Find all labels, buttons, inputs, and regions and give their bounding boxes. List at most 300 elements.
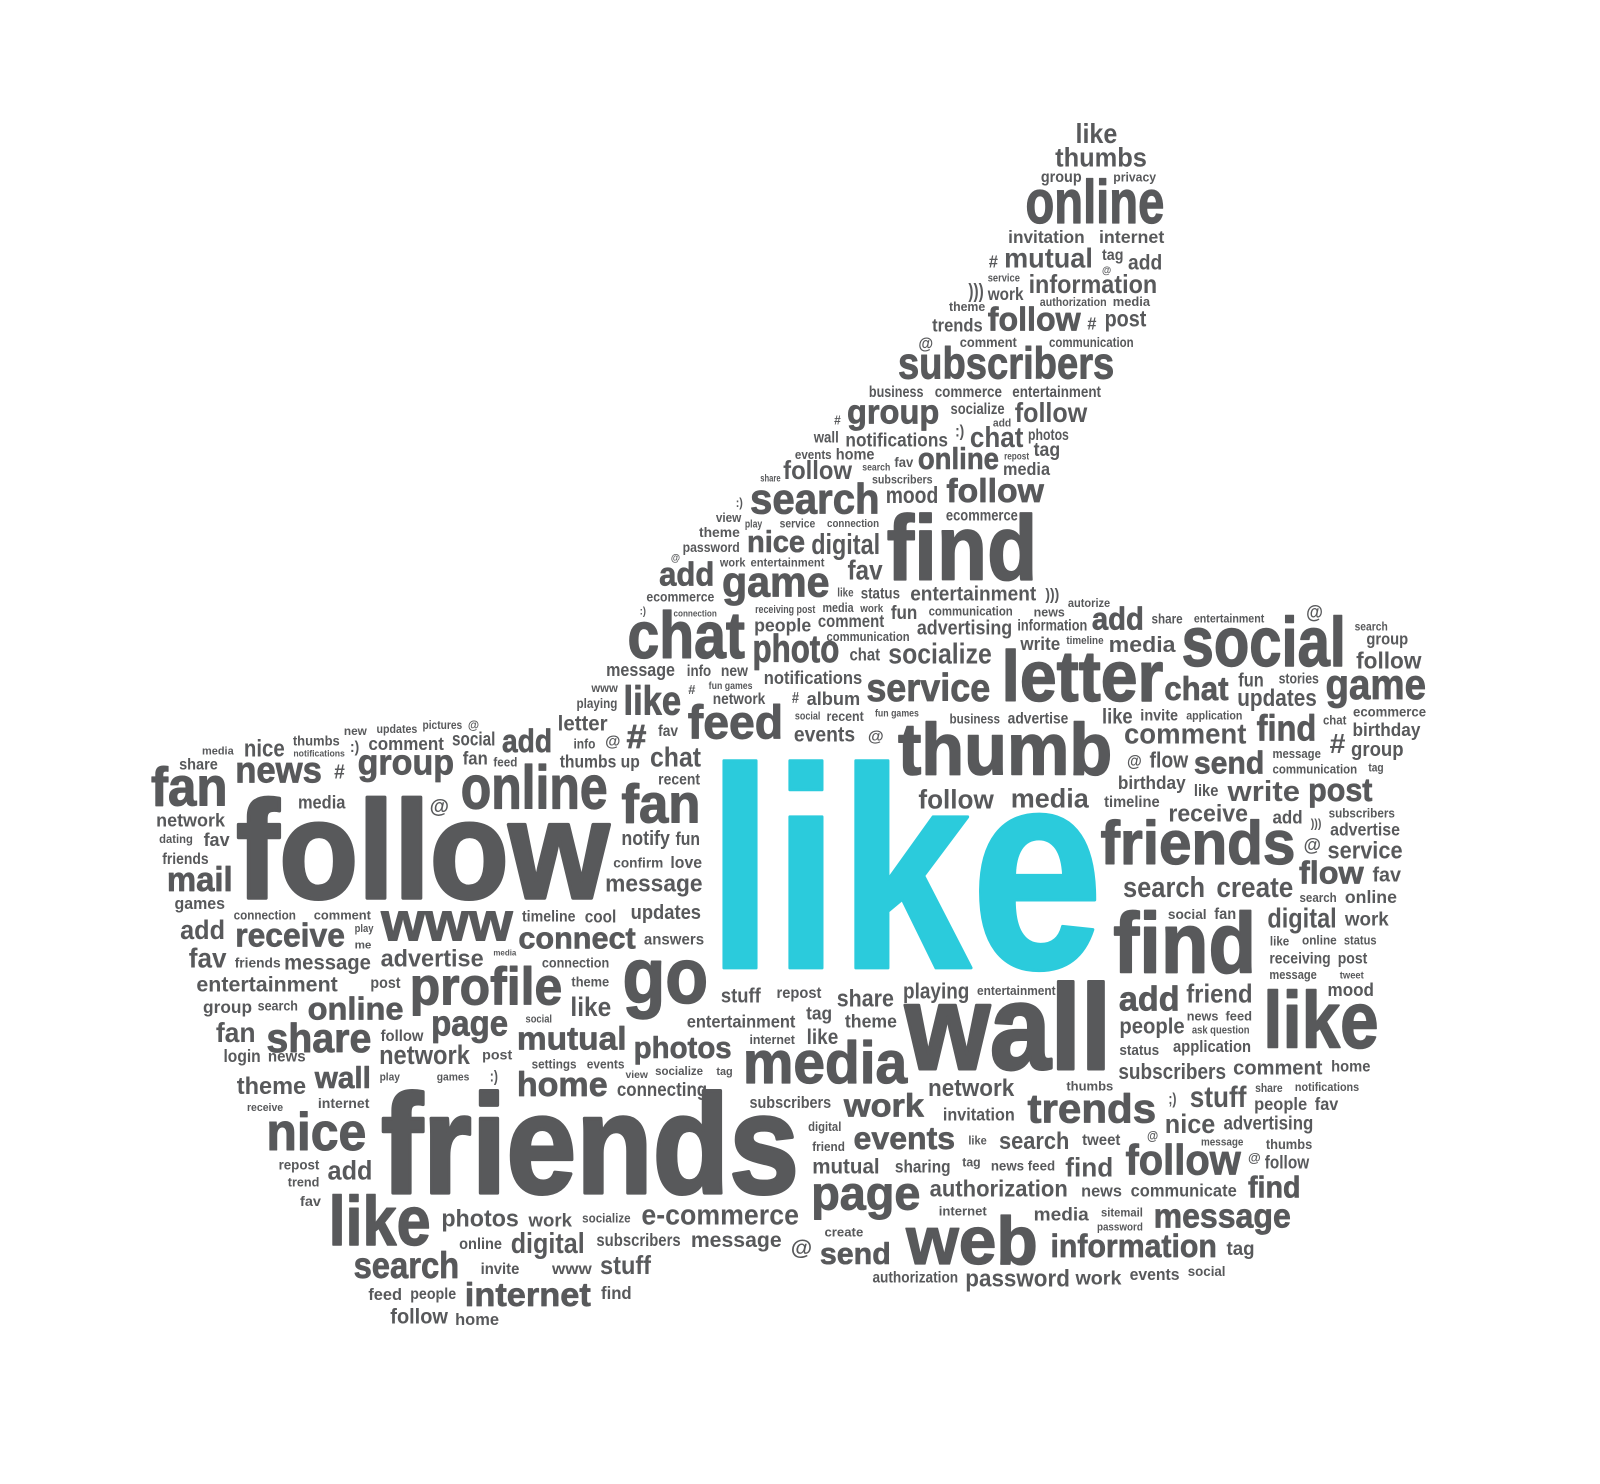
- words in the lower left of the hand: page: [431, 1004, 508, 1044]
- words on the right of the hand: birthday: [1118, 772, 1186, 793]
- words in the upper left of the hand: message: [605, 870, 703, 897]
- words at the bottom right of the hand: password: [1097, 1222, 1143, 1234]
- words in the thumb: home: [836, 447, 874, 464]
- words in the upper left of the hand: fan: [621, 772, 701, 834]
- large word: chat: chat: [628, 599, 745, 673]
- words in the upper left of the hand: fav: [189, 942, 227, 973]
- words in the knuckles row: advertising: [917, 618, 1012, 640]
- words in the lower left of the hand: events: [587, 1056, 624, 1071]
- words in the lower left of the hand: share: [266, 1015, 371, 1061]
- words in the upper left of the hand: comment: [314, 907, 371, 922]
- words at the bottom right of the hand: communicate: [1131, 1180, 1237, 1200]
- words in the upper left of the hand: info: [573, 736, 596, 752]
- words in the upper left of the hand: media: [493, 949, 517, 958]
- words in the upper left of the hand: pictures: [422, 718, 462, 732]
- words at the bottom right of the hand: tweet: [1082, 1132, 1120, 1149]
- words at the bottom right of the hand: share: [837, 986, 894, 1013]
- words in the upper left of the hand: fun: [676, 828, 700, 849]
- words at the bottom right of the hand: tag: [806, 1002, 832, 1023]
- large word: online: online: [1026, 168, 1164, 236]
- words in the upper left of the hand: www: [380, 890, 513, 952]
- words at the bottom right of the hand: theme: [845, 1011, 897, 1032]
- large word: follow: follow: [236, 773, 610, 928]
- words on the right of the hand: fav: [1315, 1094, 1339, 1114]
- words at the bottom right of the hand: web: [905, 1204, 1038, 1279]
- words on the right of the hand: receive: [1168, 800, 1248, 827]
- words on the right of the hand: media: [1011, 784, 1089, 814]
- words in the upper left of the hand: :): [350, 739, 359, 756]
- words at the bottom right of the hand: subscribers: [749, 1094, 831, 1112]
- large word: wall: wall: [904, 960, 1111, 1095]
- words in the thumb: privacy: [1113, 170, 1157, 185]
- words in the thumb: view: [716, 510, 742, 525]
- words in the knuckles row: add: [1092, 601, 1144, 637]
- words in the knuckles row: timeline: [1066, 635, 1104, 647]
- words in the upper left of the hand: group: [358, 742, 454, 782]
- words in the lower left of the hand: play: [380, 1072, 401, 1084]
- words on the right of the hand: find: [1113, 895, 1256, 991]
- words in the thumb: follow: [1015, 397, 1088, 428]
- words on the right of the hand: social: [1168, 907, 1207, 923]
- words on the right of the hand: online: [1345, 887, 1397, 907]
- words in the upper left of the hand: receive: [235, 917, 345, 954]
- words at the bottom right of the hand: digital: [808, 1119, 841, 1134]
- words in the knuckles row: find: [1257, 708, 1316, 748]
- words in the upper left of the hand: @: [430, 796, 449, 818]
- words in the knuckles row: new: [721, 663, 748, 680]
- words on the right of the hand: post: [1338, 950, 1367, 967]
- words in the upper left of the hand: @: [468, 718, 479, 732]
- words in the thumb: digital: [811, 529, 880, 561]
- words in the lower left of the hand: work: [528, 1210, 573, 1231]
- words in the knuckles row: like: [623, 677, 681, 723]
- words in the thumb: status: [861, 585, 900, 602]
- words in the knuckles row: autorize: [1068, 596, 1110, 610]
- words at the bottom right of the hand: search: [999, 1128, 1069, 1155]
- words in the knuckles row: business: [949, 711, 1000, 727]
- words at the bottom right of the hand: sitemail: [1101, 1205, 1143, 1219]
- words in the upper left of the hand: timeline: [522, 908, 576, 925]
- words in the thumb: connection: [827, 518, 879, 530]
- words on the right of the hand: advertising: [1223, 1113, 1313, 1135]
- words in the upper left of the hand: dating: [159, 832, 193, 846]
- words in the lower left of the hand: settings: [532, 1056, 577, 1071]
- words in the upper left of the hand: recent: [658, 772, 700, 789]
- words on the right of the hand: add: [1272, 806, 1303, 827]
- words at the bottom right of the hand: message: [1201, 1136, 1243, 1148]
- words in the knuckles row: media: [1109, 632, 1176, 657]
- words in the thumb: @: [918, 335, 933, 353]
- words on the right of the hand: send: [1194, 744, 1264, 780]
- words at the bottom right of the hand: @: [1248, 1150, 1261, 1165]
- words in the lower left of the hand: login: [223, 1046, 261, 1066]
- words in the upper left of the hand: online: [461, 754, 608, 822]
- words in the knuckles row: ecommerce: [1353, 704, 1426, 720]
- words at the bottom right of the hand: like: [807, 1025, 838, 1049]
- words on the right of the hand: advertise: [1330, 820, 1400, 840]
- words on the right of the hand: network: [928, 1075, 1015, 1102]
- words in the thumb: follow: [783, 457, 852, 485]
- words in the knuckles row: receiving post: [755, 604, 816, 616]
- words in the knuckles row: news: [1034, 604, 1065, 619]
- words in the thumb: connection: [673, 608, 717, 618]
- words in the knuckles row: fun: [891, 602, 917, 624]
- words on the right of the hand: events: [794, 722, 855, 746]
- words at the bottom right of the hand: message: [1154, 1198, 1291, 1236]
- words on the right of the hand: communication: [1272, 761, 1357, 776]
- words in the lower left of the hand: subscribers: [596, 1230, 681, 1250]
- words in the thumb: :): [736, 495, 743, 510]
- words at the bottom right of the hand: events: [1130, 1266, 1180, 1284]
- words in the thumb: entertainment: [910, 584, 1036, 606]
- words in the upper left of the hand: share: [179, 756, 218, 773]
- words in the lower left of the hand: online: [459, 1236, 502, 1253]
- words on the right of the hand: post: [1308, 771, 1373, 808]
- words in the upper left of the hand: cool: [585, 906, 616, 926]
- words on the right of the hand: status: [1119, 1043, 1159, 1059]
- words in the thumb: service: [988, 273, 1020, 285]
- words in the thumb: events: [795, 447, 832, 462]
- words at the bottom right of the hand: find: [1065, 1153, 1113, 1183]
- words at the bottom right of the hand: password: [965, 1266, 1070, 1293]
- words on the right of the hand: invitation: [943, 1104, 1015, 1124]
- words in the thumb: thumbs: [1055, 142, 1147, 172]
- words in the lower left of the hand: stuff: [600, 1252, 651, 1280]
- words on the right of the hand: flow: [1149, 747, 1189, 772]
- words in the upper left of the hand: love: [670, 854, 702, 872]
- words in the thumb: password: [683, 540, 740, 556]
- words in the lower left of the hand: socialize: [582, 1210, 631, 1225]
- words in the knuckles row: chat: [1323, 713, 1347, 728]
- words in the lower left of the hand: fan: [216, 1017, 256, 1048]
- words in the lower left of the hand: search: [354, 1245, 459, 1286]
- words in the thumb: information: [1029, 271, 1157, 299]
- words at the bottom right of the hand: authorization: [930, 1175, 1068, 1201]
- words on the right of the hand: timeline: [1104, 794, 1160, 811]
- words in the lower left of the hand: [196, 934, 799, 1329]
- words in the lower left of the hand: home: [455, 1311, 499, 1329]
- words on the right of the hand: thumbs: [1066, 1078, 1113, 1093]
- words in the lower left of the hand: social: [526, 1013, 552, 1025]
- words on the right of the hand: @: [868, 728, 884, 745]
- words in the knuckles row: birthday: [1353, 719, 1421, 740]
- words in the thumb: wall: [813, 429, 839, 446]
- words in the lower left of the hand: photos: [441, 1206, 519, 1233]
- words in the knuckles row: notifications: [764, 667, 862, 688]
- words in the lower left of the hand: follow: [390, 1304, 448, 1328]
- words at the bottom right of the hand: social: [1188, 1264, 1226, 1280]
- words in the lower left of the hand: group: [203, 997, 252, 1017]
- words in the knuckles row: socialize: [888, 638, 992, 670]
- words at the bottom right of the hand: @: [791, 1236, 812, 1260]
- words in the lower left of the hand: nice: [266, 1103, 366, 1162]
- words in the knuckles row: comment: [1124, 718, 1247, 750]
- words in the upper left of the hand: updates: [631, 902, 701, 924]
- words on the right of the hand: search: [1123, 872, 1205, 904]
- words in the knuckles row: network: [713, 691, 766, 708]
- words on the right of the hand: application: [1173, 1038, 1251, 1056]
- words in the knuckles row: [558, 596, 1426, 756]
- words at the bottom right of the hand: news: [1081, 1182, 1122, 1200]
- words on the right of the hand: work: [843, 1086, 925, 1123]
- words in the upper left of the hand: nice: [244, 736, 285, 763]
- large word: letter: letter: [1002, 637, 1163, 717]
- words in the lower left of the hand: entertainment: [687, 1012, 796, 1032]
- words on the right of the hand: @: [1304, 834, 1321, 855]
- words at the bottom right of the hand: like: [968, 1133, 987, 1147]
- words in the upper left of the hand: advertise: [381, 945, 484, 972]
- words in the thumb: @: [671, 553, 680, 564]
- words on the right of the hand: feed: [1226, 1008, 1252, 1023]
- words on the right of the hand: add: [1119, 981, 1180, 1019]
- words in the knuckles row: social: [795, 710, 820, 722]
- words in the knuckles row: #: [792, 690, 799, 707]
- words in the lower left of the hand: internet: [749, 1032, 795, 1047]
- words in the lower left of the hand: go: [622, 934, 708, 1020]
- words in the thumb: comment: [960, 335, 1017, 351]
- words in the knuckles row: updates: [1237, 685, 1317, 712]
- words on the right of the hand: @: [1127, 752, 1142, 770]
- words in the upper left of the hand: friends: [235, 955, 281, 971]
- words in the thumb: subscribers: [872, 473, 933, 487]
- highlighted word: like: like: [707, 709, 1103, 1029]
- words on the right of the hand: receiving: [1269, 950, 1331, 967]
- words on the right of the hand: nice: [1165, 1109, 1215, 1139]
- words at the bottom right of the hand: information: [1051, 1227, 1217, 1264]
- words in the knuckles row: @: [1306, 601, 1323, 623]
- words in the lower left of the hand: games: [437, 1072, 469, 1084]
- words in the lower left of the hand: news: [268, 1049, 306, 1066]
- words in the upper left of the hand: me: [355, 939, 371, 951]
- words in the thumb: @: [1102, 265, 1111, 276]
- words at the bottom right of the hand: tag: [962, 1154, 981, 1169]
- words on the right of the hand: people: [1119, 1014, 1185, 1039]
- words in the upper left of the hand: updates: [377, 722, 418, 736]
- words on the right of the hand: like: [1270, 933, 1289, 948]
- words at the bottom right of the hand: mutual: [812, 1154, 880, 1178]
- words in the knuckles row: fav: [658, 723, 679, 740]
- words in the knuckles row: comment: [818, 611, 884, 631]
- words at the bottom right of the hand: authorization: [872, 1270, 958, 1287]
- words in the thumb: add: [1128, 250, 1162, 274]
- words in the upper left of the hand: confirm: [613, 855, 663, 871]
- words in the upper left of the hand: mail: [167, 861, 233, 899]
- words in the thumb: chat: [970, 422, 1024, 454]
- words in the knuckles row: follow: [1356, 647, 1422, 673]
- words in the upper left of the hand: play: [355, 923, 374, 935]
- words in the thumb: #: [989, 251, 998, 271]
- words in the knuckles row: photo: [753, 628, 839, 671]
- words in the upper left of the hand: notifications: [293, 749, 345, 759]
- words in the lower left of the hand: invite: [481, 1261, 519, 1278]
- words on the right of the hand: notifications: [1295, 1080, 1359, 1094]
- words on the right of the hand: friend: [1186, 981, 1253, 1009]
- words in the thumb: tag: [1102, 247, 1123, 264]
- words in the thumb: tag: [1034, 439, 1060, 461]
- words on the right of the hand: online: [1302, 932, 1337, 947]
- words in the thumb: [640, 118, 1165, 618]
- words in the thumb: play: [745, 519, 762, 531]
- words in the upper left of the hand: thumbs: [293, 733, 340, 749]
- words in the thumb: share: [760, 474, 781, 485]
- words in the thumb: entertainment: [1012, 384, 1101, 401]
- words at the bottom right of the hand: media: [743, 1029, 908, 1096]
- words at the bottom right of the hand: @: [1147, 1128, 1158, 1143]
- words in the lower left of the hand: stuff: [721, 986, 761, 1008]
- words in the thumb: #: [1087, 314, 1097, 334]
- large word: find: find: [887, 498, 1037, 600]
- words on the right of the hand: ;): [1168, 1091, 1177, 1108]
- words in the thumb: game: [722, 558, 830, 606]
- words in the upper left of the hand: fan: [463, 747, 488, 768]
- words in the knuckles row: communication: [929, 603, 1013, 618]
- words in the thumb: mood: [886, 482, 938, 508]
- words in the upper left of the hand: comment: [368, 733, 444, 754]
- words in the thumb: add: [659, 557, 714, 594]
- words in the thumb: trends: [932, 315, 983, 336]
- words on the right of the hand: like: [1194, 782, 1218, 800]
- words in the thumb: invitation: [1008, 227, 1085, 247]
- words in the thumb: mutual: [1004, 242, 1093, 273]
- words in the thumb: group: [847, 393, 939, 431]
- words in the knuckles row: message: [606, 659, 675, 680]
- words on the right of the hand: tag: [1368, 761, 1384, 774]
- words in the upper left of the hand: social: [452, 728, 495, 750]
- words on the right of the hand: create: [1216, 872, 1293, 904]
- words in the lower left of the hand: :): [490, 1069, 498, 1086]
- words in the lower left of the hand: tag: [716, 1066, 733, 1078]
- words on the right of the hand: follow: [918, 785, 994, 815]
- words in the upper left of the hand: add: [180, 915, 225, 945]
- words in the knuckles row: chat: [1164, 671, 1229, 708]
- words on the right of the hand: friends: [1101, 809, 1295, 877]
- words in the knuckles row: communication: [827, 629, 910, 644]
- words in the thumb: authorization: [1040, 295, 1107, 309]
- large word: friends: friends: [381, 1066, 799, 1223]
- words on the right of the hand: group: [1351, 739, 1404, 761]
- words at the bottom right of the hand: find: [1248, 1170, 1301, 1204]
- words in the thumb: ecommerce: [946, 507, 1018, 524]
- words in the lower left of the hand: view: [626, 1070, 648, 1081]
- words in the lower left of the hand: network: [379, 1040, 470, 1070]
- words in the knuckles row: work: [859, 603, 884, 615]
- words in the upper left of the hand: @: [605, 733, 620, 750]
- words in the lower left of the hand: www: [551, 1261, 592, 1278]
- words in the lower left of the hand: digital: [511, 1228, 585, 1260]
- words at the bottom right of the hand: playing: [903, 978, 969, 1003]
- words in the thumb: group: [1041, 169, 1082, 186]
- words in the knuckles row: info: [687, 663, 711, 680]
- words in the knuckles row: service: [866, 667, 990, 710]
- words in the thumb: ))): [1045, 586, 1059, 603]
- words in the lower left of the hand: wall: [314, 1061, 371, 1095]
- words in the thumb: notifications: [845, 429, 948, 451]
- words on the right of the hand: subscribers: [1329, 805, 1395, 820]
- words in the thumb: follow: [946, 473, 1045, 510]
- words in the knuckles row: share: [1152, 611, 1183, 626]
- words at the bottom right of the hand: send: [820, 1237, 891, 1271]
- words on the right of the hand: news: [1187, 1008, 1218, 1023]
- words in the thumb: media: [1113, 294, 1151, 309]
- words in the knuckles row: fun: [1238, 670, 1264, 692]
- words in the thumb: theme: [699, 525, 740, 541]
- words in the knuckles row: media: [822, 600, 854, 615]
- words on the right of the hand: stuff: [1190, 1081, 1247, 1114]
- words in the thumb: work: [719, 555, 746, 569]
- large word: thumb: thumb: [898, 708, 1112, 791]
- words in the thumb: like: [1076, 118, 1117, 149]
- words at the bottom right of the hand: internet: [939, 1203, 987, 1218]
- words on the right of the hand: [794, 722, 1404, 1139]
- words in the upper left of the hand: network: [156, 810, 226, 831]
- words in the thumb: socialize: [951, 401, 1005, 418]
- words at the bottom right of the hand: news feed: [991, 1158, 1055, 1174]
- words in the knuckles row: fun games: [709, 681, 753, 692]
- words in the thumb: online: [918, 442, 999, 476]
- words at the bottom right of the hand: repost: [777, 985, 821, 1002]
- words in the upper left of the hand: connection: [234, 907, 296, 922]
- words in the thumb: service: [780, 517, 815, 531]
- words in the thumb: add: [993, 418, 1011, 430]
- words in the knuckles row: letter: [558, 712, 608, 736]
- words in the lower left of the hand: connecting: [617, 1079, 707, 1101]
- words in the thumb: commerce: [935, 384, 1002, 401]
- words in the upper left of the hand: #: [334, 762, 346, 784]
- words on the right of the hand: flow: [1299, 855, 1364, 891]
- words in the knuckles row: like: [1102, 704, 1133, 728]
- words in the lower left of the hand: find: [601, 1283, 632, 1303]
- words in the lower left of the hand: e-commerce: [641, 1199, 799, 1231]
- words in the thumb: ))): [968, 281, 984, 303]
- words in the knuckles row: people: [754, 615, 811, 636]
- words on the right of the hand: subscribers: [1118, 1059, 1226, 1084]
- words in the thumb: theme: [949, 299, 985, 314]
- words in the knuckles row: playing: [577, 696, 617, 712]
- words on the right of the hand: like: [1263, 975, 1379, 1064]
- words in the thumb: search: [862, 462, 890, 473]
- words in the knuckles row: #: [627, 719, 647, 756]
- words in the upper left of the hand: news: [235, 750, 322, 791]
- words on the right of the hand: people: [1254, 1094, 1307, 1114]
- words in the knuckles row: fun games: [875, 708, 919, 719]
- words at the bottom right of the hand: events: [854, 1120, 955, 1156]
- words in the upper left of the hand: answers: [644, 931, 704, 948]
- large word: subscribers: subscribers: [898, 338, 1114, 389]
- words on the right of the hand: write: [1226, 776, 1300, 808]
- words in the thumb: communication: [1049, 335, 1134, 350]
- words at the bottom right of the hand: follow: [1126, 1136, 1241, 1184]
- words in the lower left of the hand: profile: [410, 958, 562, 1017]
- words on the right of the hand: digital: [1267, 903, 1337, 934]
- words in the upper left of the hand: fan: [151, 756, 228, 818]
- words on the right of the hand: share: [1255, 1082, 1283, 1095]
- words in the upper left of the hand: connect: [518, 921, 636, 955]
- words in the thumb: search: [750, 475, 880, 523]
- words in the lower left of the hand: online: [308, 990, 404, 1026]
- words in the upper left of the hand: feed: [493, 754, 517, 769]
- words in the lower left of the hand: search: [258, 999, 298, 1015]
- words at the bottom right of the hand: create: [824, 1225, 863, 1240]
- words in the lower left of the hand: photos: [634, 1031, 732, 1065]
- words on the right of the hand: fav: [1372, 865, 1402, 887]
- words in the thumb: nice: [747, 525, 805, 559]
- words at the bottom right of the hand: sharing: [895, 1156, 951, 1176]
- words in the lower left of the hand: theme: [571, 975, 609, 991]
- words at the bottom right of the hand: work: [1074, 1268, 1122, 1290]
- words on the right of the hand: status: [1344, 932, 1377, 947]
- words in the thumb: media: [1003, 459, 1050, 479]
- words in the upper left of the hand: [151, 718, 704, 974]
